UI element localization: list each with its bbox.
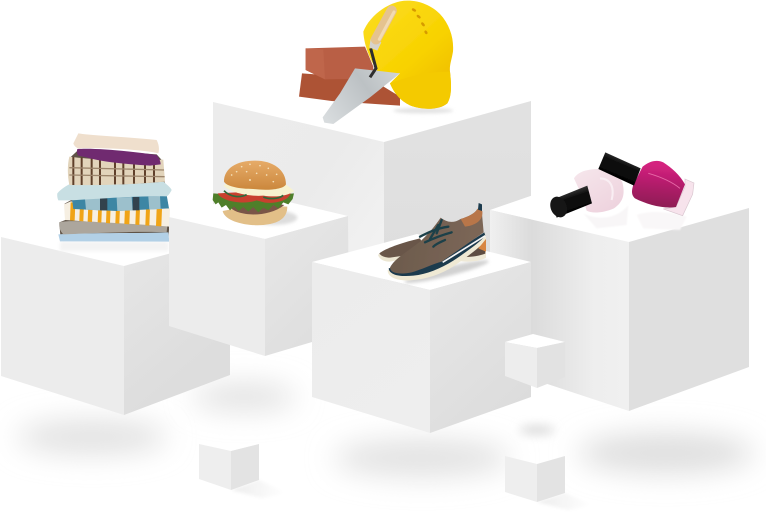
floor shadows <box>17 384 754 477</box>
cube: shoe pedestal <box>312 234 531 433</box>
trowel handle <box>376 11 392 39</box>
icon: nail polish bottles <box>547 152 694 230</box>
front shoe upper <box>390 209 484 273</box>
trowel ferrule <box>369 39 381 51</box>
small cube: bottom right <box>505 456 592 510</box>
cube: left (clothes pedestal) <box>1 208 230 415</box>
pale bottle cap <box>552 186 592 218</box>
front shoe welt <box>389 232 485 276</box>
reflection under stack <box>60 242 168 251</box>
reflections on cube top <box>583 205 628 228</box>
small cube: bottom left <box>199 444 286 498</box>
back shoe <box>378 238 428 262</box>
pink bottle polish <box>632 161 685 207</box>
icon: burger <box>213 161 297 225</box>
trowel shank <box>370 48 376 77</box>
cube: nail polish pedestal <box>490 165 749 411</box>
pink bottle cap <box>598 152 641 186</box>
cube: burger pedestal <box>169 193 349 356</box>
cube: large back (tools pedestal) <box>213 60 531 300</box>
pale bottle <box>574 169 624 212</box>
hard hat <box>363 1 453 109</box>
lower brick <box>299 73 400 106</box>
icon: brown shoes <box>378 203 490 287</box>
small cube: floating centre <box>505 334 565 388</box>
icon: bricks, trowel and hard hat <box>299 1 453 124</box>
upper brick <box>306 47 373 79</box>
front shoe sole <box>388 232 486 280</box>
pink bottle glass <box>663 179 694 216</box>
dark backing between layers <box>59 149 169 240</box>
trowel blade <box>323 68 400 124</box>
icon: stack of folded clothes <box>57 133 172 251</box>
cast shadow <box>393 108 453 114</box>
